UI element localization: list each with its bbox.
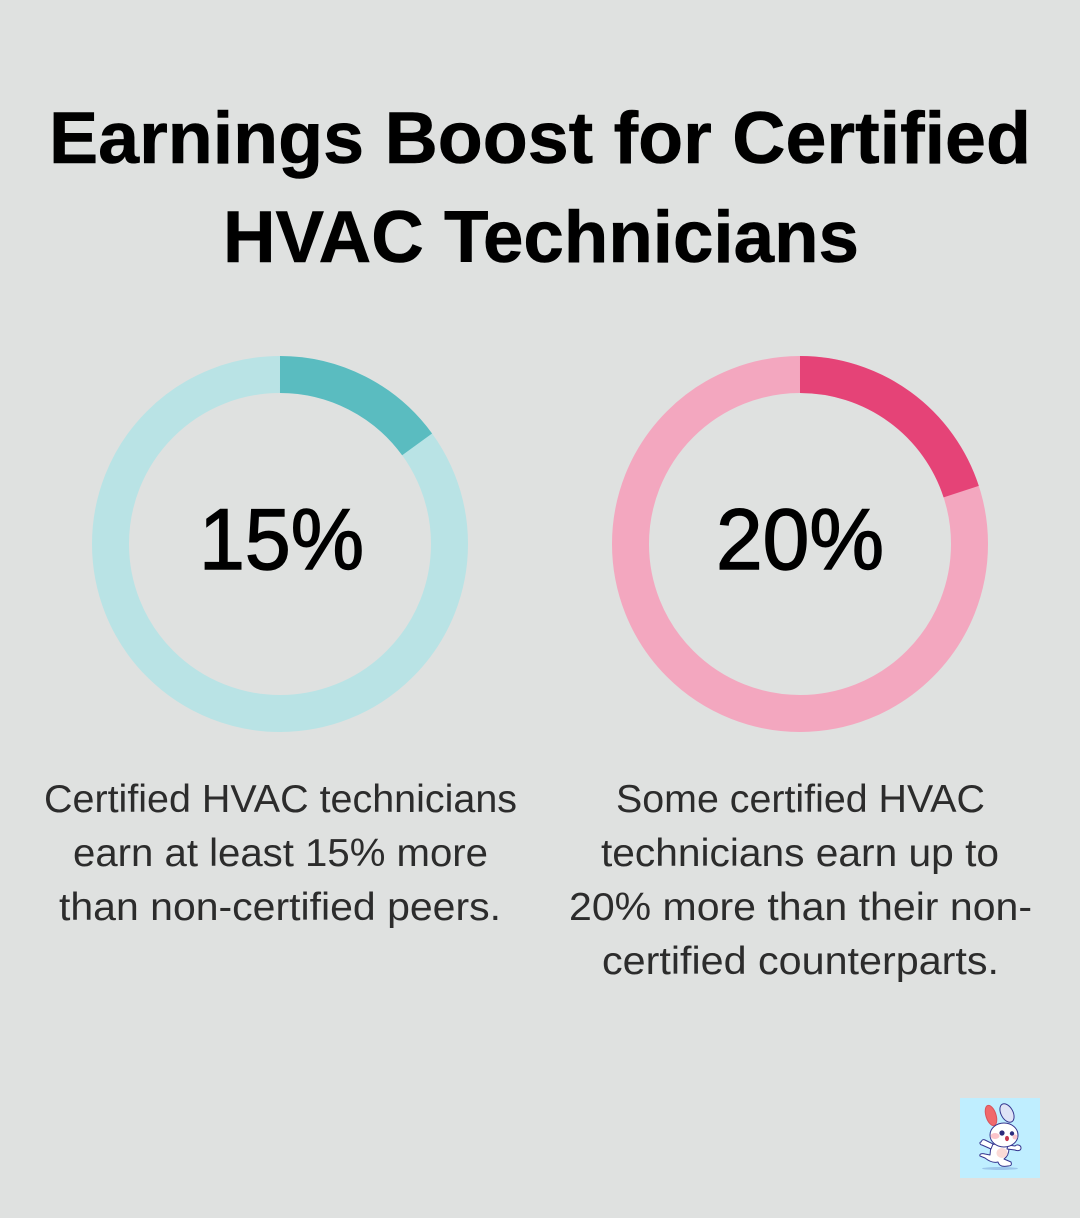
title bbox=[49, 98, 1031, 278]
donut chart: 20% bbox=[630, 374, 970, 714]
value: 15%: 15% bbox=[199, 492, 364, 588]
description: 15% bbox=[44, 778, 517, 929]
value: 20%: 20% bbox=[716, 492, 884, 588]
title: HVAC Technicians bbox=[223, 197, 859, 278]
description: 20%: Some certified HVAC bbox=[616, 778, 985, 821]
donut chart: 15% bbox=[110, 374, 450, 714]
icon: rabbit logo bbox=[960, 1098, 1040, 1178]
description: 20%: 20% more than their non- bbox=[569, 886, 1032, 929]
panel: 20% stat bbox=[569, 374, 1032, 983]
description: 15%: Certified HVAC technicians bbox=[44, 778, 517, 821]
description: 20%: technicians earn up to bbox=[601, 832, 999, 875]
description: 20% bbox=[569, 778, 1032, 983]
description: 15%: earn at least 15% more bbox=[73, 832, 488, 875]
panel: 15% stat bbox=[44, 374, 517, 929]
title: Earnings Boost for Certified bbox=[49, 98, 1031, 179]
description: 15%: than non-certified peers. bbox=[59, 886, 501, 929]
description: 20%: certified counterparts. bbox=[602, 940, 999, 983]
